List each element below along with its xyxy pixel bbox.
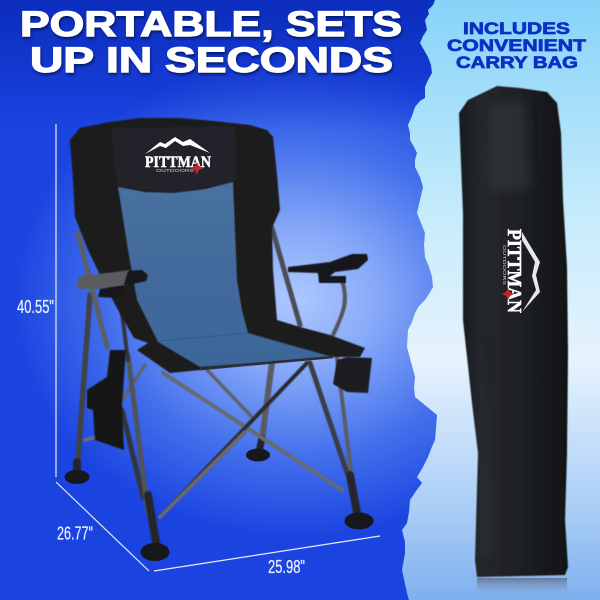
- logo on chair: [145, 137, 211, 175]
- chair seat front rail: [200, 357, 333, 369]
- icon: red star: [190, 162, 204, 175]
- bag logo: [502, 229, 540, 313]
- chair right armrest: [288, 254, 368, 283]
- chair black fabric: [70, 118, 365, 373]
- carry bag: [459, 86, 568, 577]
- dimension: height label: 40.55": [17, 296, 54, 317]
- bag logo star: [502, 288, 514, 300]
- chair: [64, 118, 374, 561]
- bag fold shading: [488, 100, 530, 190]
- dimension: height line: [55, 124, 57, 477]
- title: PORTABLE, SETS: [20, 5, 402, 44]
- dimension: depth label: 26.77": [57, 522, 93, 544]
- chair rear legs and cross braces: [77, 228, 358, 548]
- heading: carry bag: CARRY BAG: [456, 54, 578, 72]
- chair seat crease: [158, 333, 248, 341]
- panel: light torn-paper background: [402, 0, 600, 600]
- chair feet: [64, 448, 374, 561]
- bag body: [459, 86, 568, 577]
- chair side pouch: [87, 350, 126, 450]
- bag logo name: PITTMAN: [503, 229, 525, 313]
- heading: carry bag: INCLUDES: [463, 20, 570, 38]
- icon: mountain logo: [145, 137, 210, 154]
- chair left armrest cap: [98, 270, 148, 298]
- chair cup holder: [333, 357, 372, 393]
- dimension: width line: [154, 536, 380, 571]
- bag logo subtitle: OUTDOORS: [502, 245, 507, 285]
- dimension: width label: 25.98": [268, 556, 305, 577]
- bag lower shading: [482, 330, 492, 560]
- title: UP IN SECONDS: [30, 41, 393, 80]
- brand name: PITTMAN: [145, 154, 211, 171]
- bag logo mountain: [522, 232, 540, 312]
- panel: blue top shading: [0, 0, 440, 130]
- heading: carry bag: CONVENIENT: [447, 37, 586, 55]
- dimension: depth line: [56, 482, 149, 571]
- title: [20, 5, 402, 80]
- chair blue back and seat panel: [118, 182, 333, 367]
- chair headrest seam shading: [112, 126, 237, 193]
- brand subtitle: OUTDOORS: [156, 168, 194, 173]
- heading: carry bag: [447, 20, 586, 72]
- chair left armrest: [77, 270, 130, 289]
- carry bag reflection: [477, 578, 567, 598]
